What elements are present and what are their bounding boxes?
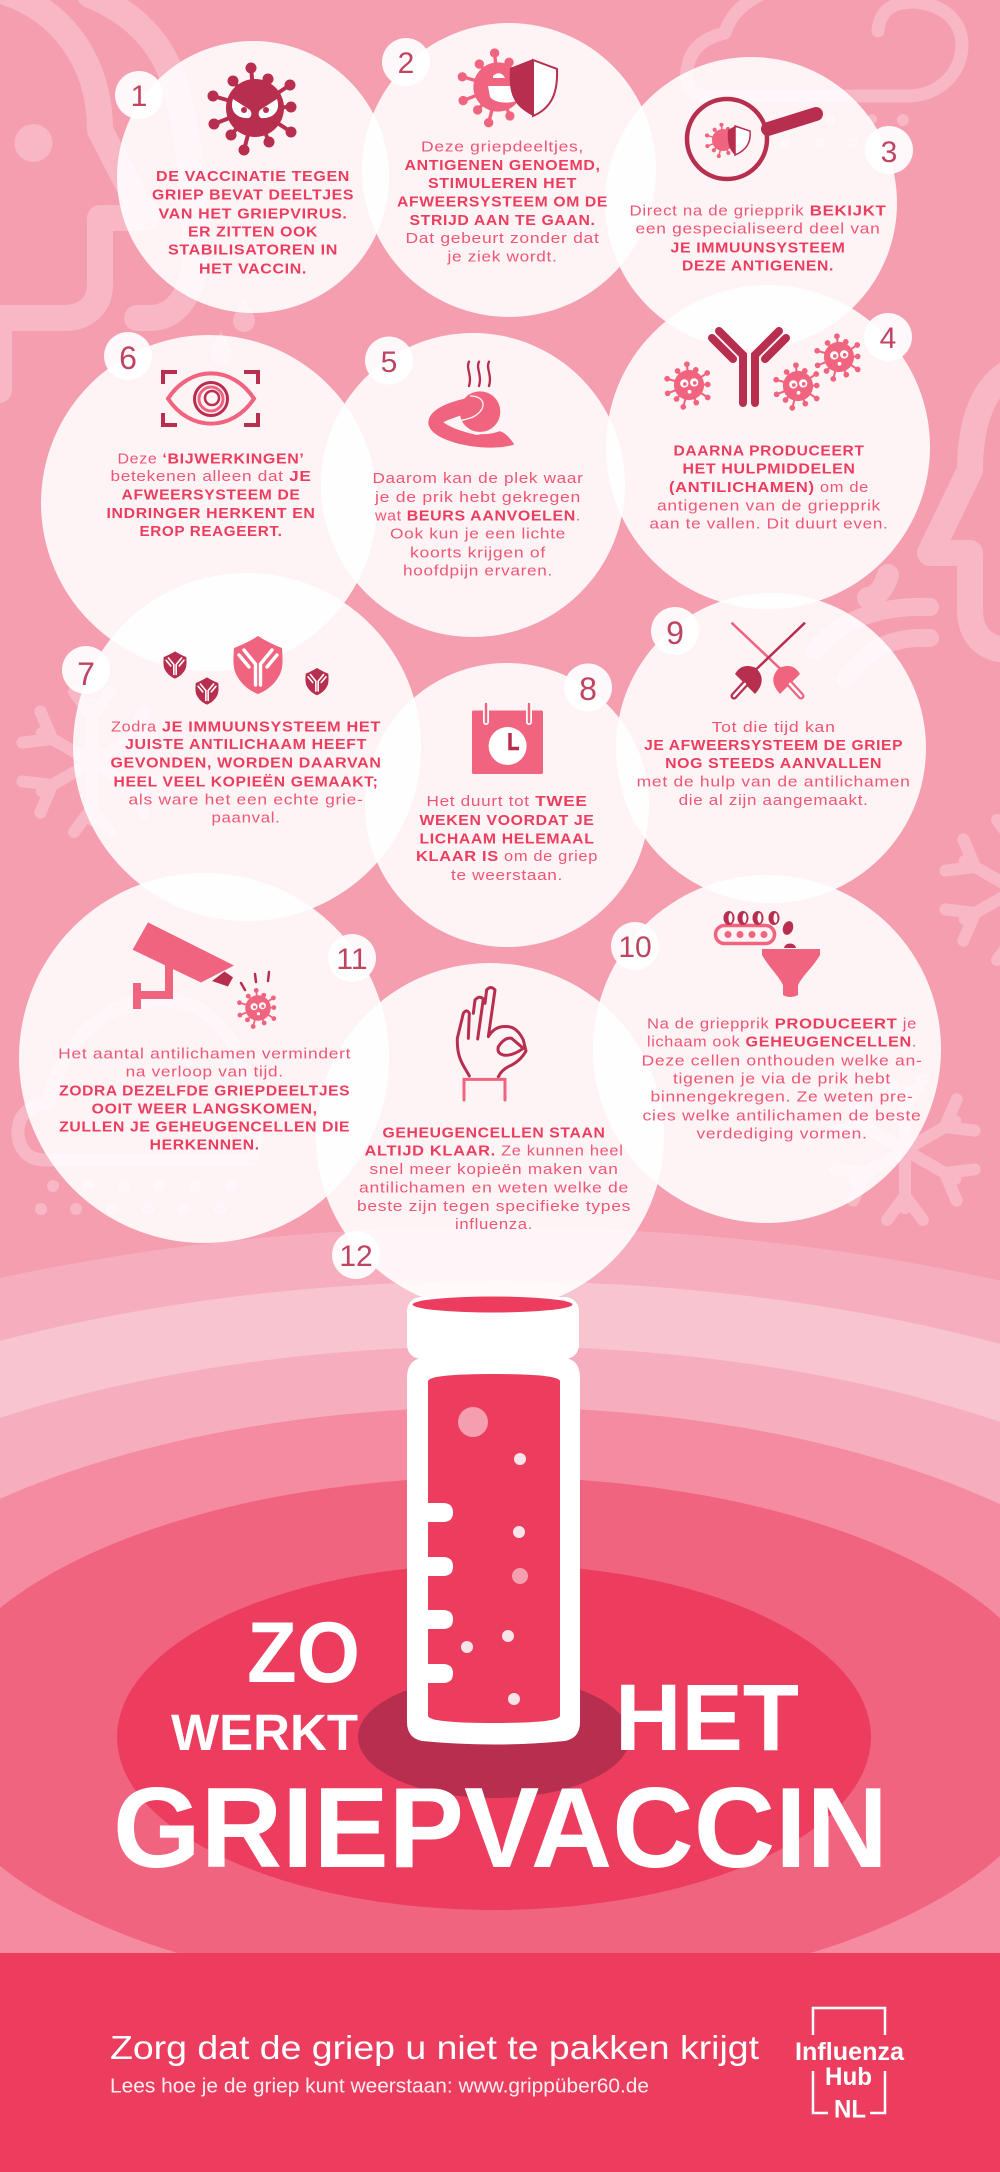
number 7 [62,646,110,694]
number 9 [651,607,699,655]
text: step 1: GRIEP BEVAT DEELTJES [152,187,354,204]
text: step 2 [397,138,608,265]
text: step 12: snel meer kopieën maken van [370,1161,618,1178]
logo: Influenza Hub NL: NL [834,2096,866,2124]
number 12 [332,1231,380,1279]
text: step 12 [357,1125,631,1233]
icon: conveyor and funnel [716,911,820,997]
panel: step 3 [630,99,913,274]
text: step 1: ER ZITTEN OOK [188,224,318,240]
text: step 10: tigenen je via de prik hebt [673,1070,891,1087]
title: GRIEPVACCIN [113,1765,888,1892]
footer text: Zorg dat de griep u niet te pakken krijgt [110,2029,759,2066]
text: step 7: als ware het een echte grie- [128,792,364,809]
text: step 5 [372,470,584,579]
text: step 5: Daarom kan de plek waar [372,470,584,487]
text: step 11: ZULLEN JE GEHEUGENCELLEN DIE [59,1119,350,1136]
footer text: Lees hoe je de griep kunt weerstaan: www.grippüber60.de [110,2076,649,2098]
footer text [110,2029,759,2098]
text: step 7: Zodra JE IMMUUNSYSTEEM HET [111,718,381,735]
text: step 1: VAN HET GRIEPVIRUS. [158,205,348,222]
text: step 12: influenza. [455,1216,533,1233]
number 8 [564,664,612,712]
text: step 9: Tot die tijd kan [712,719,836,736]
text: step 4 [650,442,888,533]
text: step 2: Dat gebeurt zonder dat [406,230,600,247]
logo: Influenza Hub NL [795,2008,905,2124]
panel: step 5 [365,336,584,579]
number 1: 1 [131,80,147,113]
text: step 9 [637,719,911,809]
text: step 10: verdediging vormen. [696,1126,868,1143]
number 6: 6 [119,340,137,376]
icon: swollen arm with steam [428,362,514,448]
number 5: 5 [381,346,397,379]
panel: step 12 [332,987,631,1279]
text: step 5: wat BEURS AANVOELEN . [374,507,581,524]
text: step 7 [110,718,382,826]
icon: antibody shields [163,636,329,705]
number 3 [865,126,913,174]
text: step 6: EROP REAGEERT. [140,523,282,540]
text: step 7: HEEL VEEL KOPIEËN GEMAAKT; [114,773,378,790]
logo: Influenza Hub NL: Influenza [795,2038,905,2066]
text: step 4: aan te vallen. Dit duurt even. [650,516,888,533]
panel: step 1 [115,62,354,278]
text: step 8: te weerstaan. [451,867,563,884]
text: step 4: antigenen van de griepprik [657,498,881,514]
text: step 10: cies welke antilichamen de beste [642,1108,922,1125]
text: step 7: GEVONDEN, WORDEN DAARVAN [110,754,382,771]
icon: magnifying glass [687,99,816,179]
text: step 12: GEHEUGENCELLEN STAAN [382,1125,606,1142]
text: step 6 [106,450,316,540]
text: step 11: OOIT WEER LANGSKOMEN, [92,1101,318,1118]
text: step 2: STRIJD AAN TE GAAN. [410,212,596,229]
text: step 6: Deze ‘BIJWERKINGEN’ [118,450,304,467]
text: step 1: STABILISATOREN IN [168,242,338,259]
text: step 10: binnengekregen. Ze weten pre- [650,1089,914,1106]
text: step 5: Ook kun je een lichte [390,526,566,543]
text: step 8: Het duurt tot TWEE [426,793,588,810]
text: step 11: Het aantal antilichamen vermindert [58,1045,351,1062]
text: step 5: je de prik hebt gekregen [374,489,581,506]
number 8: 8 [579,671,597,707]
icon: crossed swords [732,623,805,696]
number 1 [115,71,163,119]
text: step 3: een gespecialiseerd deel van [636,221,880,238]
footer band [0,1953,1000,2172]
text: step 10: Deze cellen onthouden welke an- [642,1052,922,1069]
text: step 7: JUISTE ANTILICHAAM HEEFT [125,736,367,753]
text: step 10: lichaam ook GEHEUGENCELLEN . [647,1034,917,1051]
text: step 8 [416,793,598,884]
text: step 2: je ziek wordt. [446,248,558,265]
step circles [19,23,941,1311]
text: step 4: HET HULPMIDDELEN [682,461,856,478]
text: step 9: die al zijn aangemaakt. [679,792,869,809]
decorative background outlines [0,0,1000,1245]
text: step 8: KLAAR IS om de griep [416,848,598,865]
panel: step 10 [611,911,922,1143]
number 11: 11 [336,943,368,976]
number 9: 9 [666,615,684,651]
title: HET [615,1665,799,1771]
number 5 [365,336,413,384]
text: step 3: JE IMMUUNSYSTEEM [670,239,846,256]
number 10 [611,922,659,970]
text: step 11: na verloop van tijd. [126,1064,284,1081]
text: step 11: ZODRA DEZELFDE GRIEPDEELTJES [59,1083,350,1100]
text: step 1: HET VACCIN. [199,261,307,278]
text: step 6: INDRINGER HERKENT EN [106,505,316,522]
logo: Influenza Hub NL: Hub [825,2063,872,2091]
icon: angry virus [208,62,296,156]
text: step 12: antilichamen en weten welke de [359,1180,629,1197]
number 7: 7 [77,656,95,692]
text: step 10: Na de griepprik PRODUCEERT je [647,1015,917,1032]
panel: step 11 [58,922,376,1154]
text: step 7: paanval. [212,809,280,826]
number 6 [104,332,152,380]
number 4: 4 [880,322,896,355]
text: step 10 [642,1015,922,1143]
text: step 2: STIMULEREN HET [428,175,577,192]
text: step 6: betekenen alleen dat JE [110,468,312,485]
icon: security camera and virus [133,922,276,1029]
icon: calendar clock [472,704,543,774]
number 3: 3 [881,136,897,169]
title: ZO [247,1605,360,1701]
text: step 5: hoofdpijn ervaren. [403,562,553,579]
icon: OK hand [457,987,526,1100]
panel: step 4 [650,313,912,533]
text: step 11 [58,1045,351,1154]
text: step 11: HERKENNEN. [150,1137,260,1154]
text: step 8: WEKEN VOORDAT JE [420,812,594,829]
title [113,1605,888,1892]
text: step 9: met de hulp van de antilichamen [637,773,911,790]
concentric background ellipses [0,1227,1000,2172]
number 10: 10 [618,931,652,964]
text: step 5: koorts krijgen of [410,544,546,562]
text: step 6: AFWEERSYSTEEM DE [122,486,300,503]
text: step 3 [630,202,886,274]
text: step 1: DE VACCINATIE TEGEN [156,168,350,185]
text: step 8: LICHAAM HELEMAAL [420,830,594,847]
number 2: 2 [398,47,414,80]
number 12: 12 [339,1240,373,1273]
text: step 1 [152,168,354,278]
panel: step 7 [62,636,382,826]
text: step 12: ALTIJD KLAAR. Ze kunnen heel [364,1143,624,1160]
number 2 [382,38,430,86]
vaccine vial [407,1296,580,1744]
number 4 [864,313,912,361]
text: step 2: ANTIGENEN GENOEMD, [404,157,600,174]
panel: step 9 [637,607,911,809]
text: step 2: AFWEERSYSTEEM OM DE [397,193,608,210]
icon: antibody and viruses [664,331,861,411]
text: step 2: Deze griepdeeltjes, [421,138,584,155]
text: step 4: DAARNA PRODUCEERT [674,442,864,460]
title: WERKT [171,1704,358,1761]
icon: eye with brackets [163,372,258,425]
text: step 3: Direct na de griepprik BEKIJKT [630,202,886,220]
panel: step 6 [104,332,316,540]
text: step 9: NOG STEEDS AANVALLEN [665,755,882,772]
text: step 9: JE AFWEERSYSTEEM DE GRIEP [644,737,903,754]
icon: virus with shield [458,48,557,127]
text: step 3: DEZE ANTIGENEN. [682,258,834,274]
number 11 [328,934,376,982]
panel: step 2 [382,38,608,265]
text: step 12: beste zijn tegen specifieke types [357,1198,631,1215]
panel: step 8 [416,664,612,884]
text: step 4: (ANTILICHAMEN) om de [669,479,869,496]
